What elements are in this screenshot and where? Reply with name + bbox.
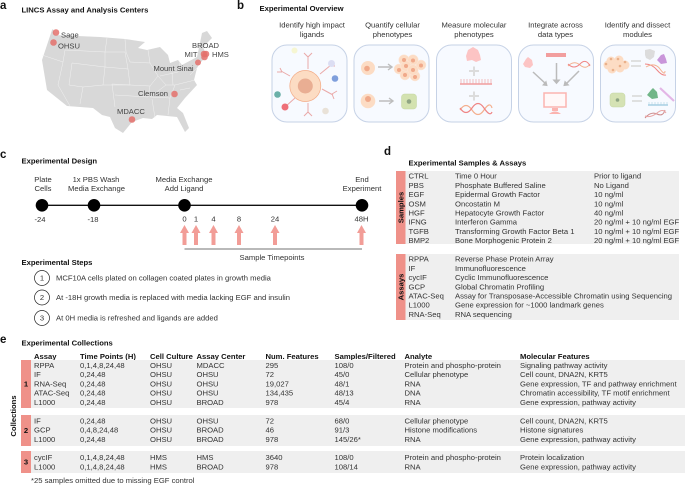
step titles: modules bbox=[623, 30, 652, 39]
map markers and labels: MIT bbox=[184, 50, 198, 59]
assays table: Global Chromatin Profiling bbox=[455, 282, 544, 291]
collection 3: BROAD bbox=[196, 462, 224, 471]
panel letter d: d bbox=[384, 146, 391, 158]
collection 1: OHSU bbox=[150, 379, 172, 388]
collection 1: BROAD bbox=[196, 398, 224, 407]
timeline: 0 bbox=[182, 214, 187, 224]
collection 3: HMS bbox=[196, 453, 213, 462]
panel letter b: b bbox=[237, 0, 244, 12]
experimental steps list: 2 bbox=[40, 293, 44, 302]
samples table: Oncostatin M bbox=[455, 199, 500, 208]
collection 1: OHSU bbox=[150, 361, 172, 370]
table header: Num. Features bbox=[266, 352, 319, 361]
collection 1: Chromatin accessibility, TF motif enrichment bbox=[520, 389, 670, 398]
collection 2: 978 bbox=[266, 435, 278, 444]
collection 1: 1 bbox=[24, 380, 29, 388]
collection 2: L1000 bbox=[34, 435, 55, 444]
step titles: ligands bbox=[300, 30, 324, 39]
timeline: 4 bbox=[211, 214, 216, 224]
timeline: Add Ligand bbox=[165, 184, 203, 193]
collection 2: Cellular phenotype bbox=[404, 416, 468, 425]
map markers and labels: Clemson bbox=[138, 89, 168, 98]
samples table: PBS bbox=[408, 181, 424, 190]
collection 1: 0,24,48 bbox=[80, 389, 106, 398]
assays table: L1000 bbox=[408, 301, 430, 310]
samples table: OSM bbox=[408, 199, 426, 208]
samples table: Prior to ligand bbox=[594, 172, 641, 181]
samples table: EGF bbox=[408, 190, 425, 199]
panel letter a: a bbox=[0, 0, 7, 12]
collection 1: RNA-Seq bbox=[34, 379, 66, 388]
collection 2: 2 bbox=[24, 426, 28, 435]
collection 1: IF bbox=[34, 370, 41, 379]
collection 2: Histone signatures bbox=[520, 426, 583, 435]
heading: LINCS Assay and Analysis Centers: LINCS Assay and Analysis Centers bbox=[22, 6, 148, 14]
collection 3: 978 bbox=[266, 462, 278, 471]
step titles: Integrate across bbox=[528, 20, 583, 30]
samples table: CTRL bbox=[408, 172, 428, 181]
assays table: IF bbox=[408, 264, 416, 273]
collection 1: 295 bbox=[266, 361, 278, 370]
collection 2: OHSU bbox=[150, 416, 172, 425]
collection 1: 134,435 bbox=[266, 389, 293, 398]
timeline bbox=[34, 175, 382, 224]
samples table: 20 ng/ml + 10 ng/ml EGF bbox=[594, 236, 679, 245]
timeline: -18 bbox=[87, 215, 99, 224]
collection 3: 3640 bbox=[266, 453, 282, 462]
collection 1 bbox=[21, 360, 685, 408]
card: integrate data types bbox=[518, 45, 594, 122]
collection 2: 72 bbox=[266, 416, 274, 425]
card: cellular phenotypes bbox=[354, 45, 429, 122]
collection 3: 0,1,4,8,24,48 bbox=[80, 453, 125, 462]
footnote: *25 samples omitted due to missing EGF control bbox=[31, 476, 195, 485]
collection 1: 0,24,48 bbox=[80, 379, 106, 388]
heading: Experimental Overview: Experimental Overview bbox=[260, 4, 344, 13]
heading: Experimental Steps: Experimental Steps bbox=[22, 258, 92, 267]
experimental steps list bbox=[34, 270, 290, 326]
collection 3: L1000 bbox=[34, 462, 55, 471]
collection 1: MDACC bbox=[196, 361, 225, 370]
collection 1: 48/1 bbox=[334, 379, 349, 388]
collection 2: 91/3 bbox=[334, 426, 349, 435]
map markers and labels: BROAD bbox=[192, 41, 220, 50]
panel letter c: c bbox=[0, 149, 7, 161]
collection 2: 46 bbox=[266, 426, 274, 435]
assays table: Cyclic Immunofluorescence bbox=[455, 273, 548, 282]
card: identify modules bbox=[600, 45, 676, 122]
table header: Samples/Filtered bbox=[334, 352, 396, 361]
assays table: Reverse Phase Protein Array bbox=[455, 255, 554, 264]
collection 3: HMS bbox=[150, 453, 167, 462]
collection 3: 3 bbox=[24, 458, 28, 466]
samples table: Transforming Growth Factor Beta 1 bbox=[455, 227, 574, 236]
experimental steps list: MCF10A cells plated on collagen coated plates in growth media bbox=[56, 274, 272, 282]
map markers and labels: OHSU bbox=[58, 42, 80, 50]
collection 2: GCP bbox=[34, 426, 51, 435]
collection 3: Protein localization bbox=[520, 453, 584, 462]
table header: Assay bbox=[34, 352, 57, 361]
step titles: Identify and dissect bbox=[605, 20, 671, 30]
collection 2: 0,4,8,24,48 bbox=[80, 426, 118, 435]
map markers and labels bbox=[50, 29, 229, 123]
map markers and labels: HMS bbox=[212, 50, 229, 59]
collection 1: RPPA bbox=[34, 361, 55, 370]
assays table: cycIF bbox=[408, 273, 427, 282]
collection 1: Gene expression, TF and pathway enrichment bbox=[520, 379, 677, 388]
panel e: experimental collections bbox=[0, 334, 685, 485]
collection 3: RNA bbox=[404, 462, 422, 471]
collection 1: RNA bbox=[404, 398, 422, 407]
samples table: BMP2 bbox=[408, 236, 429, 245]
collection 2: IF bbox=[34, 416, 41, 425]
timeline: Media Exchange bbox=[68, 184, 125, 193]
collection 2: Gene expression, pathway activity bbox=[520, 435, 636, 444]
collection 1: OHSU bbox=[196, 370, 219, 379]
card: identify ligands bbox=[272, 45, 347, 122]
collection 1: ATAC-Seq bbox=[34, 389, 69, 398]
map markers and labels: Sage bbox=[61, 30, 79, 40]
collection 1: DNA bbox=[404, 389, 422, 398]
panel letter e: e bbox=[0, 334, 6, 346]
assays table bbox=[396, 254, 679, 320]
step titles: phenotypes bbox=[454, 30, 494, 39]
samples table: Phosphate Buffered Saline bbox=[455, 181, 546, 190]
collection 2: OHSU bbox=[150, 426, 172, 435]
collection 2: 0,24,48 bbox=[80, 435, 106, 444]
samples table: Bone Morphogenic Protein 2 bbox=[455, 236, 552, 245]
collection 3: HMS bbox=[150, 462, 167, 471]
collection 2: RNA bbox=[404, 435, 422, 444]
collection 3: Protein and phospho-protein bbox=[404, 453, 501, 462]
collection 1: Cell count, DNA2N, KRT5 bbox=[520, 370, 608, 379]
assays table: Gene expression for ~1000 landmark genes bbox=[455, 301, 604, 310]
collection 3 bbox=[21, 451, 685, 473]
collection 3: 108/0 bbox=[334, 453, 354, 462]
step titles: Measure molecular bbox=[442, 20, 507, 30]
collection 1: OHSU bbox=[150, 398, 172, 407]
map markers and labels: Mount Sinai bbox=[154, 64, 194, 73]
table header: Cell Culture bbox=[150, 352, 193, 361]
step titles: phenotypes bbox=[373, 30, 412, 39]
assays table: RNA-Seq bbox=[408, 310, 441, 319]
samples table: Hepatocyte Growth Factor bbox=[455, 208, 545, 218]
assays table: Assays bbox=[396, 274, 406, 300]
collection 1: OHSU bbox=[150, 370, 172, 379]
collection 1: 45/4 bbox=[334, 398, 350, 407]
collection 2: OHSU bbox=[196, 416, 219, 425]
collections axis label: Collections bbox=[9, 395, 18, 437]
assays table: Assay for Transposase-Accessible Chromatin using Sequencing bbox=[455, 292, 672, 300]
assays table: GCP bbox=[408, 282, 425, 291]
collection 2: BROAD bbox=[196, 426, 224, 435]
collection 1: 0,24,48 bbox=[80, 398, 106, 407]
map markers and labels: MDACC bbox=[117, 107, 145, 116]
collection 2: Cell count, DNA2N, KRT5 bbox=[520, 416, 608, 425]
collection 1: 48/13 bbox=[334, 389, 354, 398]
collection 2: OHSU bbox=[150, 435, 172, 444]
collection 3: cycIF bbox=[34, 453, 53, 462]
samples table: No Ligand bbox=[594, 181, 629, 190]
card: molecular phenotypes bbox=[436, 45, 512, 122]
collection 1: L1000 bbox=[34, 398, 55, 407]
heading: Experimental Samples & Assays: Experimental Samples & Assays bbox=[408, 158, 526, 168]
panel d: samples and assays bbox=[384, 146, 679, 320]
collection 1: 19,027 bbox=[266, 379, 289, 388]
timeline: 48H bbox=[354, 214, 369, 224]
step titles bbox=[279, 20, 671, 39]
samples table: 20 ng/ml + 10 ng/ml EGF bbox=[594, 218, 679, 227]
experimental steps list: At 0H media is refreshed and ligands are added bbox=[56, 314, 218, 322]
sample timepoint arrows bbox=[180, 225, 366, 245]
table header: Analyte bbox=[404, 352, 432, 361]
collection 1: RNA bbox=[404, 379, 422, 388]
timeline: 1 bbox=[194, 214, 198, 224]
samples table: Epidermal Growth Factor bbox=[455, 190, 540, 199]
collection 1: Gene expression, pathway activity bbox=[520, 398, 636, 407]
samples table: HGF bbox=[408, 208, 425, 218]
collection 1: Protein and phospho-protein bbox=[404, 361, 501, 370]
collection 3: 0,1,4,8,24,48 bbox=[80, 462, 125, 471]
collection 1: 0,24,48 bbox=[80, 370, 106, 379]
timeline: Media Exchange bbox=[156, 175, 212, 184]
step titles: Identify high impact bbox=[279, 20, 346, 30]
timeline: 24 bbox=[271, 214, 280, 224]
collection 1: 978 bbox=[266, 398, 278, 407]
assays table: RNA sequencing bbox=[455, 310, 512, 319]
heading: Experimental Design: Experimental Design bbox=[22, 156, 97, 166]
timeline: Experiment bbox=[343, 184, 382, 193]
collection 2: 68/0 bbox=[334, 416, 349, 425]
collection 1: 0,1,4,8,24,48 bbox=[80, 361, 125, 370]
table header: Molecular Features bbox=[520, 352, 590, 361]
collection 2 bbox=[21, 415, 685, 446]
collection 1: Signaling pathway activity bbox=[520, 361, 608, 370]
assays table: ATAC-Seq bbox=[408, 292, 444, 300]
table header: Time Points (H) bbox=[80, 352, 136, 361]
collection 2: 0,24,48 bbox=[80, 416, 106, 425]
samples table: TGFB bbox=[408, 227, 429, 236]
collection 1: OHSU bbox=[150, 389, 172, 398]
collection 1: Cellular phenotype bbox=[404, 370, 468, 379]
samples table: 10 ng/ml + 10 ng/ml EGF bbox=[594, 227, 679, 236]
timeline: End bbox=[355, 175, 369, 184]
timeline: 8 bbox=[237, 214, 241, 224]
sample timepoints bracket: Sample Timepoints bbox=[240, 253, 305, 262]
samples table: 40 ng/ml bbox=[594, 208, 624, 218]
samples table bbox=[396, 171, 679, 245]
samples table: Samples bbox=[396, 192, 406, 223]
timeline: 1x PBS Wash bbox=[73, 175, 119, 184]
experimental steps list: 3 bbox=[40, 314, 44, 322]
collection 1: 108/0 bbox=[334, 361, 354, 370]
collection 2: BROAD bbox=[196, 435, 224, 444]
panel b: experimental overview bbox=[237, 0, 676, 122]
samples table: 10 ng/ml bbox=[594, 190, 624, 199]
assays table: RPPA bbox=[408, 255, 430, 264]
timeline: Plate bbox=[34, 175, 52, 184]
collection 3: 108/14 bbox=[334, 462, 359, 471]
collection 1: 72 bbox=[266, 370, 274, 379]
samples table: 10 ng/ml bbox=[594, 199, 624, 208]
collection 1: 45/0 bbox=[334, 370, 349, 379]
panel c: experimental design bbox=[0, 149, 382, 326]
samples table: Time 0 Hour bbox=[455, 172, 497, 181]
step titles: data types bbox=[538, 30, 573, 39]
experimental steps list: 1 bbox=[40, 274, 44, 282]
collection 3: Gene expression, pathway activity bbox=[520, 462, 636, 471]
samples table: Interferon Gamma bbox=[455, 218, 518, 227]
collection 1: OHSU bbox=[196, 379, 219, 388]
experimental steps list: At -18H growth media is replaced with media lacking EGF and insulin bbox=[56, 293, 290, 302]
panel a: LINCS centers map bbox=[0, 0, 229, 133]
timeline: -24 bbox=[34, 215, 46, 224]
assays table: Immunofluorescence bbox=[455, 264, 526, 273]
step titles: Quantify cellular bbox=[365, 20, 420, 30]
table header bbox=[34, 352, 590, 361]
US map bbox=[42, 29, 212, 133]
collection 1: OHSU bbox=[196, 389, 219, 398]
collection 2: Histone modifications bbox=[404, 426, 477, 435]
timeline: Cells bbox=[35, 184, 52, 193]
collection 2: 145/26* bbox=[334, 435, 361, 444]
heading: Experimental Collections: Experimental Collections bbox=[22, 338, 113, 348]
table header: Assay Center bbox=[196, 352, 245, 361]
samples table: IFNG bbox=[408, 218, 427, 227]
